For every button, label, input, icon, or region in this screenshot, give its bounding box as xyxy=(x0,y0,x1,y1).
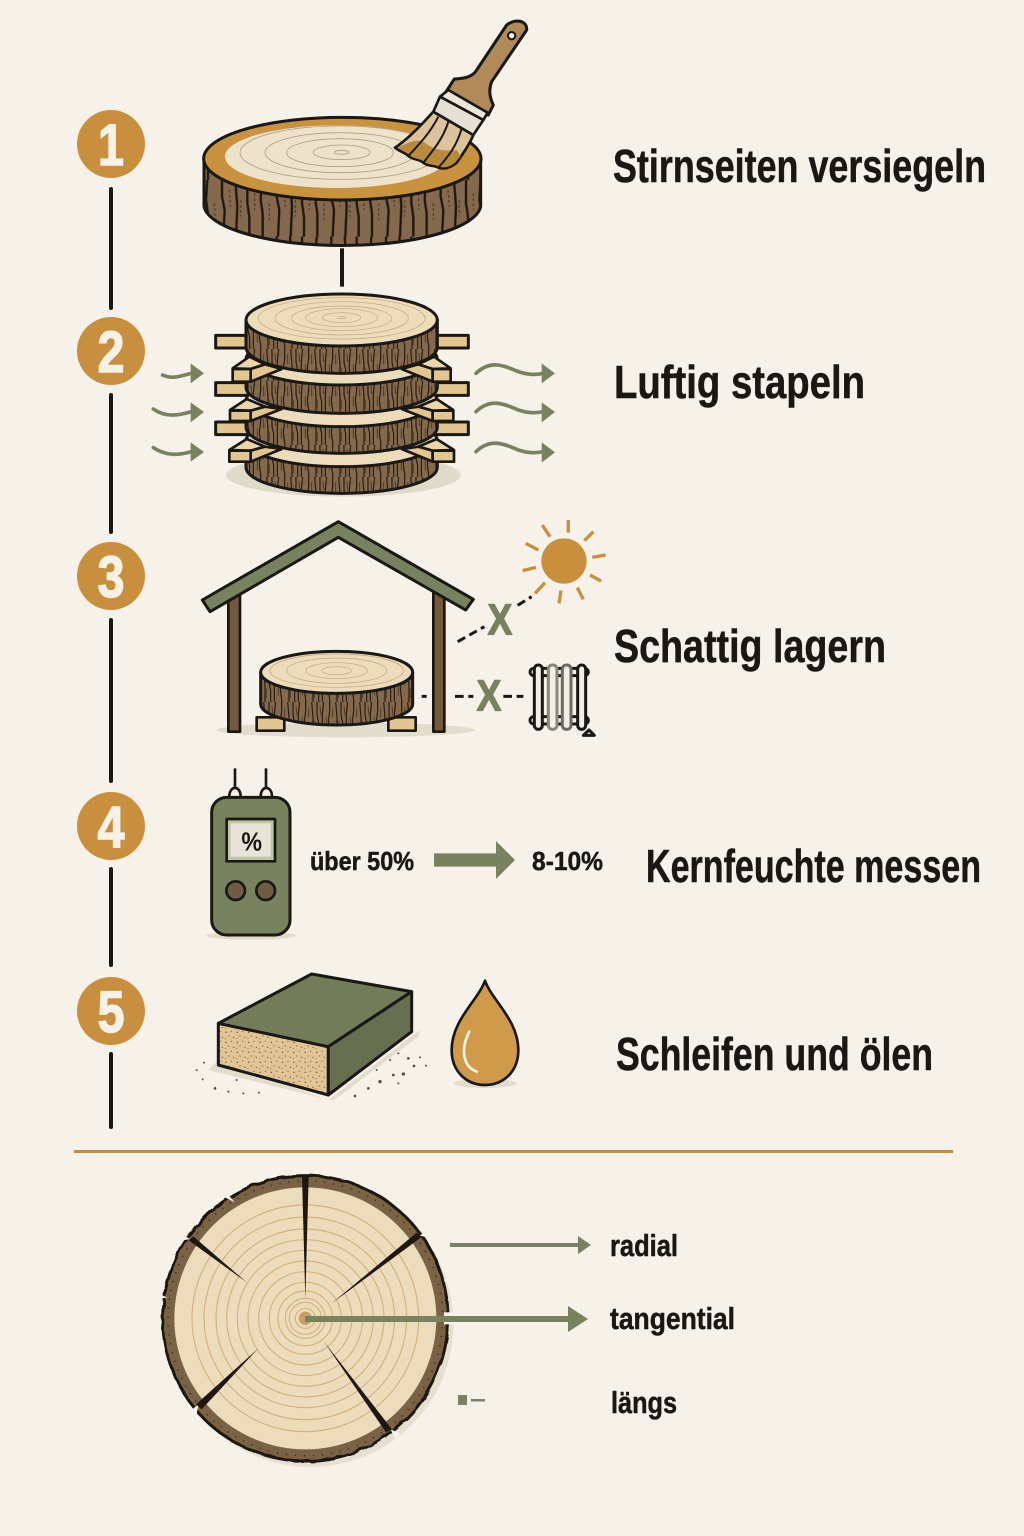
step number 1: 1 xyxy=(98,113,124,178)
arrow: tangential xyxy=(305,1306,588,1332)
illustration: sealed log slice with brush xyxy=(204,21,527,287)
illustration: cross section with cracks xyxy=(156,1176,456,1467)
sun xyxy=(523,520,606,603)
step number 4: 4 xyxy=(98,795,124,860)
illustration: moisture meter, sanding block, oil xyxy=(196,768,518,1101)
moisture arrow xyxy=(434,841,515,879)
heading: step 5: Schleifen und ölen xyxy=(616,1028,933,1080)
oil drop xyxy=(452,981,518,1088)
blocked paths with X marks xyxy=(422,597,532,721)
timeline xyxy=(77,110,145,1129)
spacer battens, lower level xyxy=(229,439,454,462)
growth rings xyxy=(192,1205,419,1432)
spacer battens, upper level xyxy=(233,357,451,382)
step number 1 xyxy=(77,110,145,178)
roof xyxy=(202,522,473,612)
radiator xyxy=(530,665,594,735)
label: moisture before: über 50% xyxy=(310,846,414,876)
blocked paths with X marks: X xyxy=(477,673,501,721)
step number 5 xyxy=(77,977,145,1045)
step number 2 xyxy=(77,317,145,385)
divider xyxy=(74,1150,953,1153)
illustration: moisture meter, sanding block, oil: % xyxy=(241,827,262,857)
label: tangential: tangential xyxy=(610,1301,735,1336)
sanding dust xyxy=(196,1052,427,1097)
step number 4 xyxy=(77,792,145,860)
paint brush xyxy=(395,21,527,168)
step number 3: 3 xyxy=(98,545,124,610)
sanding block xyxy=(196,974,427,1101)
step number 5: 5 xyxy=(98,980,124,1045)
arrow: radial xyxy=(450,1236,591,1254)
bark notches xyxy=(156,1193,456,1439)
blocked paths with X marks: X xyxy=(488,597,512,645)
heading: step 3: Schattig lagern xyxy=(614,620,886,672)
illustration: airy stack of log slices xyxy=(153,294,555,497)
label: längs: längs xyxy=(611,1385,677,1420)
marker: longitudinal xyxy=(458,1395,485,1405)
airflow arrows xyxy=(153,363,555,463)
spacer battens, middle level xyxy=(230,399,453,421)
heading: step 2: Luftig stapeln xyxy=(614,356,865,408)
label: moisture after: 8-10% xyxy=(532,846,603,876)
label: radial: radial xyxy=(610,1228,678,1263)
step number 2: 2 xyxy=(98,320,124,385)
illustration: shaded storage under a roof xyxy=(202,520,606,737)
step number 3 xyxy=(77,542,145,610)
log slice under roof xyxy=(261,651,413,725)
radial cracks xyxy=(189,1176,422,1432)
